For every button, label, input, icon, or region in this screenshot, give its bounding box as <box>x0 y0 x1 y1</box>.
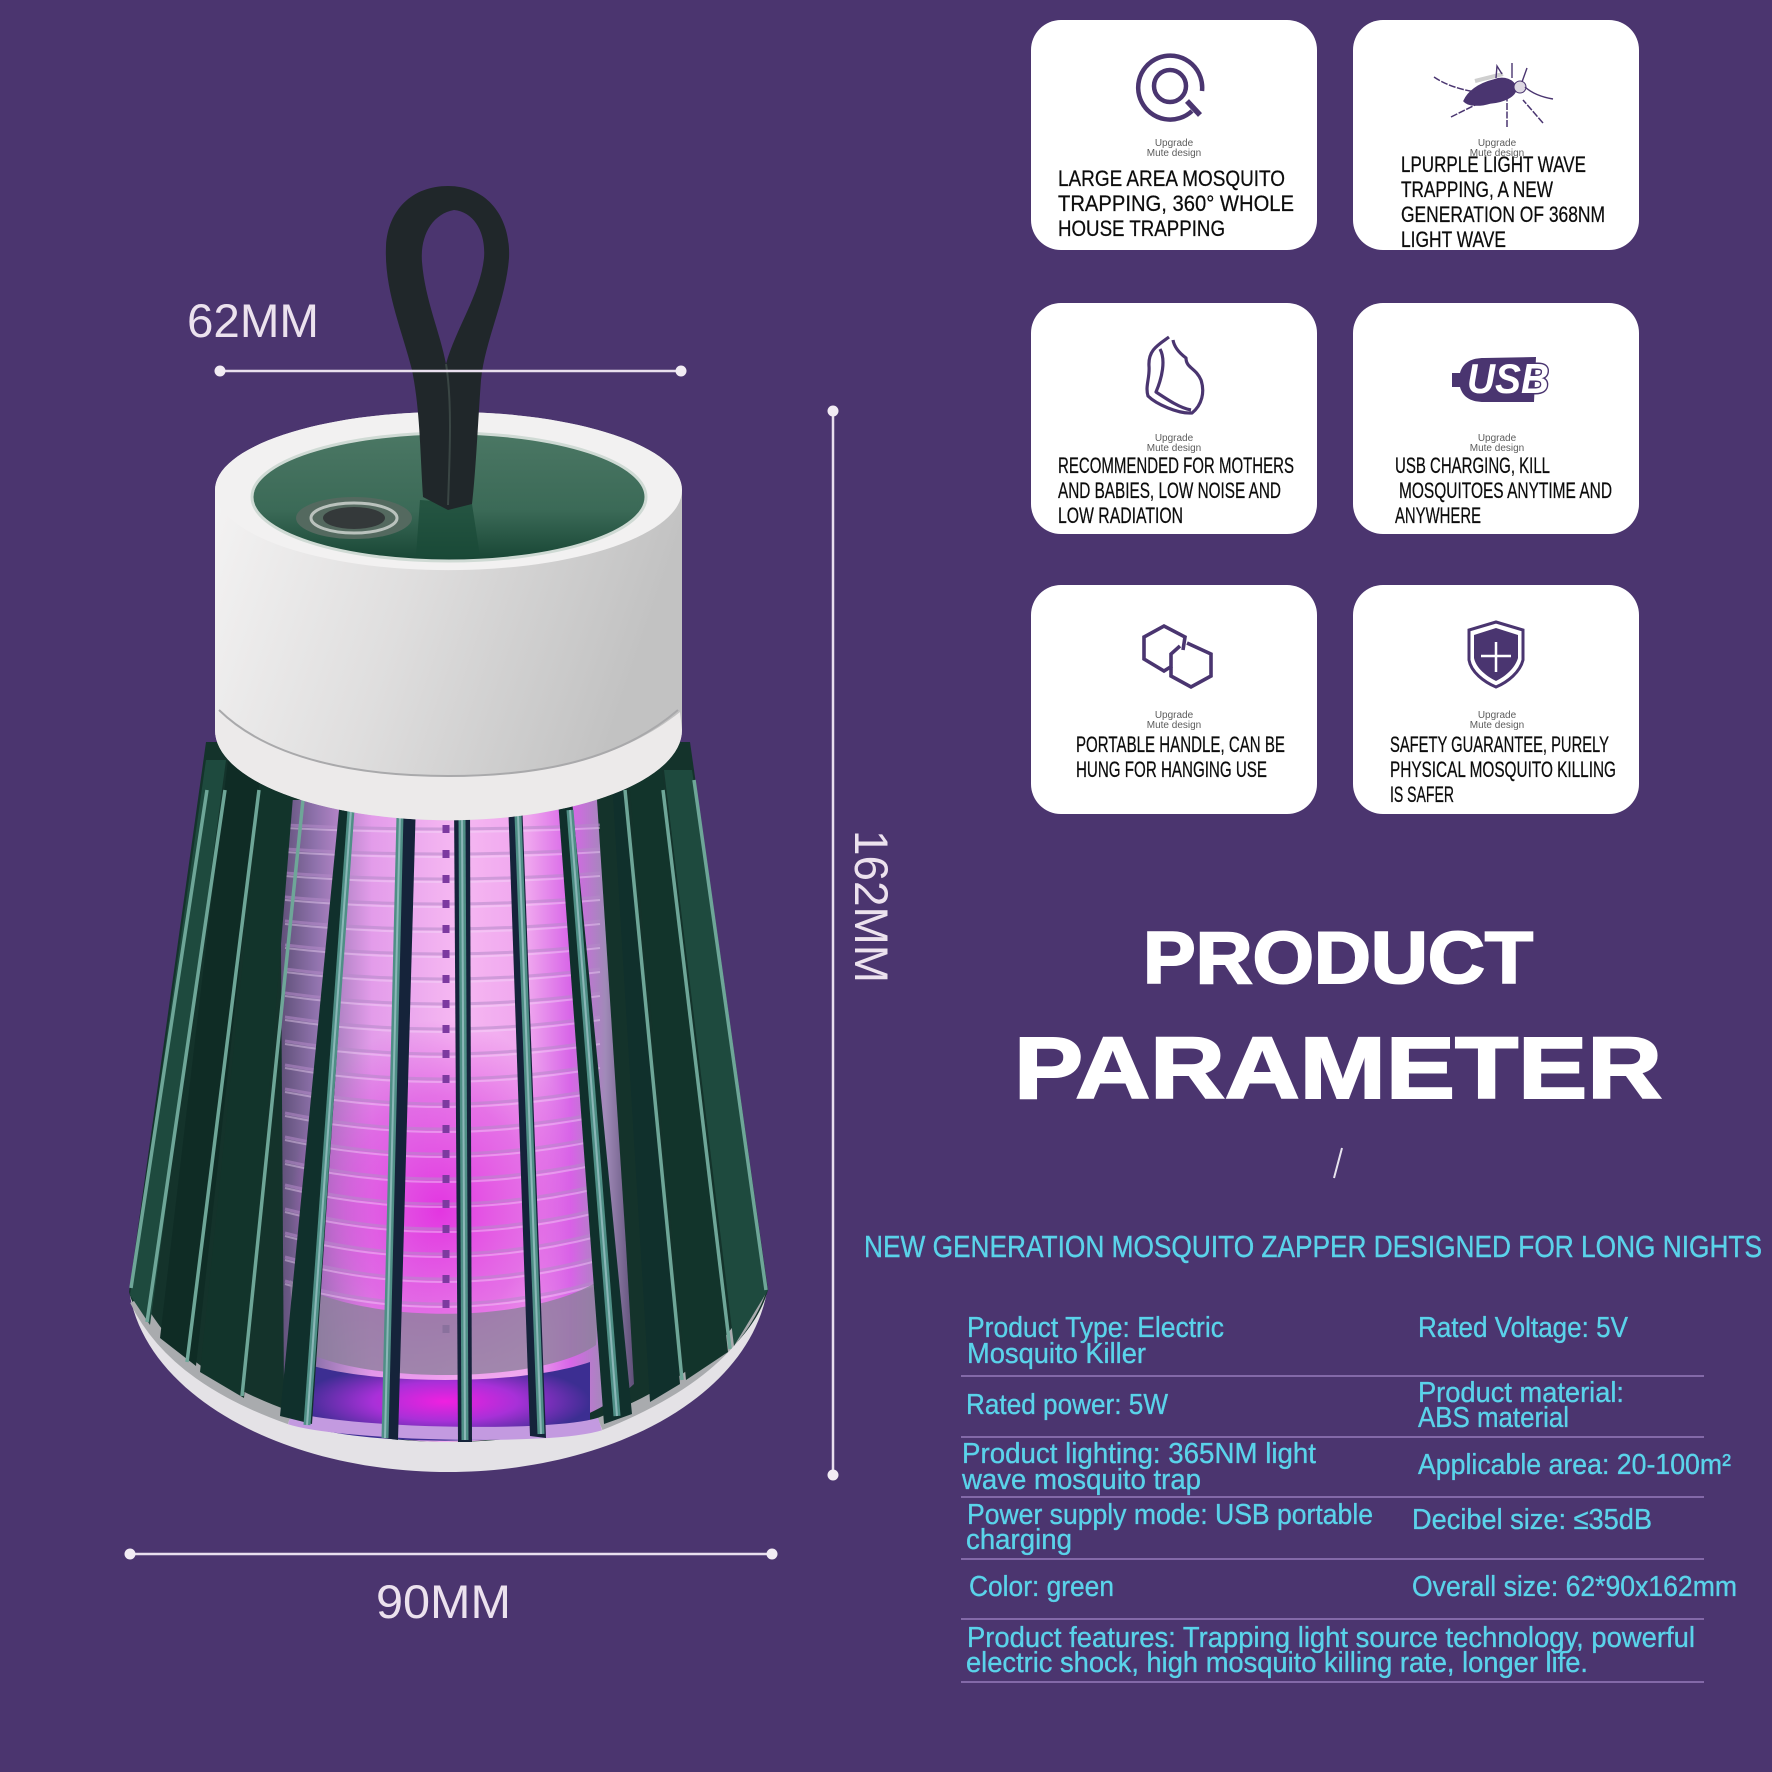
title: PARAMETER <box>1014 1020 1662 1117</box>
row: lighting and area: wave mosquito trap <box>961 1464 1201 1496</box>
description: HOUSE TRAPPING <box>1058 216 1225 241</box>
row: lighting and area: Product lighting: 365NM light <box>962 1438 1316 1470</box>
caption <box>1470 710 1524 731</box>
caption: Upgrade <box>1478 433 1517 444</box>
description: ANYWHERE <box>1395 503 1481 528</box>
panel: safety guarantee <box>1353 585 1639 814</box>
dimension: 62MM width <box>187 294 686 376</box>
panel: USB charging <box>1353 303 1639 534</box>
caption: Mute design <box>1470 443 1524 454</box>
row: power and material <box>966 1377 1624 1434</box>
row: product type and voltage <box>967 1312 1629 1370</box>
icon: mosquito <box>1434 63 1553 127</box>
description: RECOMMENDED FOR MOTHERS <box>1058 453 1294 478</box>
description: MOSQUITOES ANYTIME AND <box>1399 478 1612 503</box>
panel: large area trapping <box>1031 20 1317 250</box>
panel: purple light wave <box>1353 20 1639 252</box>
strap shadow <box>416 500 480 558</box>
row: color and size: Overall size: 62*90x162mm <box>1412 1571 1737 1603</box>
description: IS SAFER <box>1390 782 1454 807</box>
row: power supply and decibel: charging <box>966 1524 1072 1556</box>
dimension: 90MM base width: 90MM <box>376 1575 511 1628</box>
caption: Mute design <box>1147 443 1201 454</box>
description: AND BABIES, LOW NOISE AND <box>1058 478 1281 503</box>
caption: Mute design <box>1470 720 1524 731</box>
description: GENERATION OF 368NM <box>1401 202 1605 227</box>
caption: Upgrade <box>1478 710 1517 721</box>
title <box>1014 918 1662 1117</box>
row: power supply and decibel: Decibel size: ≤35dB <box>1412 1504 1652 1536</box>
description <box>1058 453 1294 528</box>
caption: Mute design <box>1147 720 1201 731</box>
description: LARGE AREA MOSQUITO <box>1058 166 1285 191</box>
lamp cage fins <box>130 760 768 1442</box>
caption: Upgrade <box>1478 138 1517 149</box>
panel: mothers and babies <box>1031 303 1317 534</box>
description: TRAPPING, 360° WHOLE <box>1058 191 1294 216</box>
row: product features: Product features: Trapping light source technology, powerful <box>967 1622 1695 1654</box>
caption <box>1147 710 1201 731</box>
description <box>1390 732 1616 807</box>
description: TRAPPING, A NEW <box>1401 177 1553 202</box>
dimension: 162MM height: 162MM <box>845 830 898 983</box>
dimension: 62MM width: 62MM <box>187 294 319 347</box>
caption: Upgrade <box>1155 433 1194 444</box>
row: product type and voltage: Rated Voltage: 5V <box>1418 1312 1629 1344</box>
row: color and size <box>969 1571 1737 1603</box>
row: lighting and area <box>961 1438 1731 1496</box>
description: PORTABLE HANDLE, CAN BE <box>1076 732 1285 757</box>
icon: USB badge: USB <box>1467 355 1549 402</box>
caption <box>1470 138 1524 159</box>
description: LIGHT WAVE <box>1401 227 1506 252</box>
icon: shield with cross <box>1469 622 1523 687</box>
lamp base plate <box>130 1292 767 1472</box>
row: product features: electric shock, high mosquito killing rate, longer life. <box>966 1647 1588 1679</box>
caption: Mute design <box>1470 148 1524 159</box>
caption <box>1470 433 1524 454</box>
power button <box>296 497 412 539</box>
caption: Mute design <box>1147 148 1201 159</box>
description <box>1401 152 1605 252</box>
hanging strap <box>386 186 509 510</box>
description: HUNG FOR HANGING USE <box>1076 757 1267 782</box>
slash mark <box>1334 1148 1342 1178</box>
title: PRODUCT <box>1143 918 1533 999</box>
row: power and material: ABS material <box>1418 1402 1569 1434</box>
row: product features <box>966 1622 1695 1679</box>
caption: Upgrade <box>1155 138 1194 149</box>
product photo: mosquito lamp <box>129 186 768 1472</box>
description: SAFETY GUARANTEE, PURELY <box>1390 732 1609 757</box>
description <box>1076 732 1285 782</box>
caption <box>1147 433 1201 454</box>
lamp cage body <box>129 742 768 1442</box>
row: color and size: Color: green <box>969 1571 1114 1603</box>
description: PHYSICAL MOSQUITO KILLING <box>1390 757 1616 782</box>
caption: Upgrade <box>1155 710 1194 721</box>
row: power supply and decibel <box>966 1499 1652 1556</box>
icon: magnifier circle <box>1138 56 1202 120</box>
icon: linked hexagons <box>1144 626 1211 687</box>
row: power and material: Product material: <box>1418 1377 1624 1409</box>
row: power and material: Rated power: 5W <box>966 1389 1169 1421</box>
panel: portable handle <box>1031 585 1317 814</box>
row: product type and voltage: Product Type: Electric <box>967 1312 1224 1344</box>
description <box>1058 166 1294 241</box>
row: power supply and decibel: Power supply mode: USB portable <box>967 1499 1373 1531</box>
description: USB CHARGING, KILL <box>1395 453 1550 478</box>
caption <box>1147 138 1201 159</box>
row: product type and voltage: Mosquito Killer <box>967 1338 1146 1370</box>
lamp cap <box>215 412 682 820</box>
description: LOW RADIATION <box>1058 503 1183 528</box>
dimension: 90MM base width <box>124 1548 778 1628</box>
dimension: 162MM height <box>828 406 898 1480</box>
specification table <box>961 1312 1737 1682</box>
icon: pregnant silhouette <box>1147 337 1203 413</box>
row: lighting and area: Applicable area: 20-100m² <box>1418 1449 1731 1481</box>
ledge between fins <box>136 1290 760 1433</box>
description <box>1395 453 1612 528</box>
top green disc <box>252 433 646 561</box>
description: LPURPLE LIGHT WAVE <box>1401 152 1586 177</box>
